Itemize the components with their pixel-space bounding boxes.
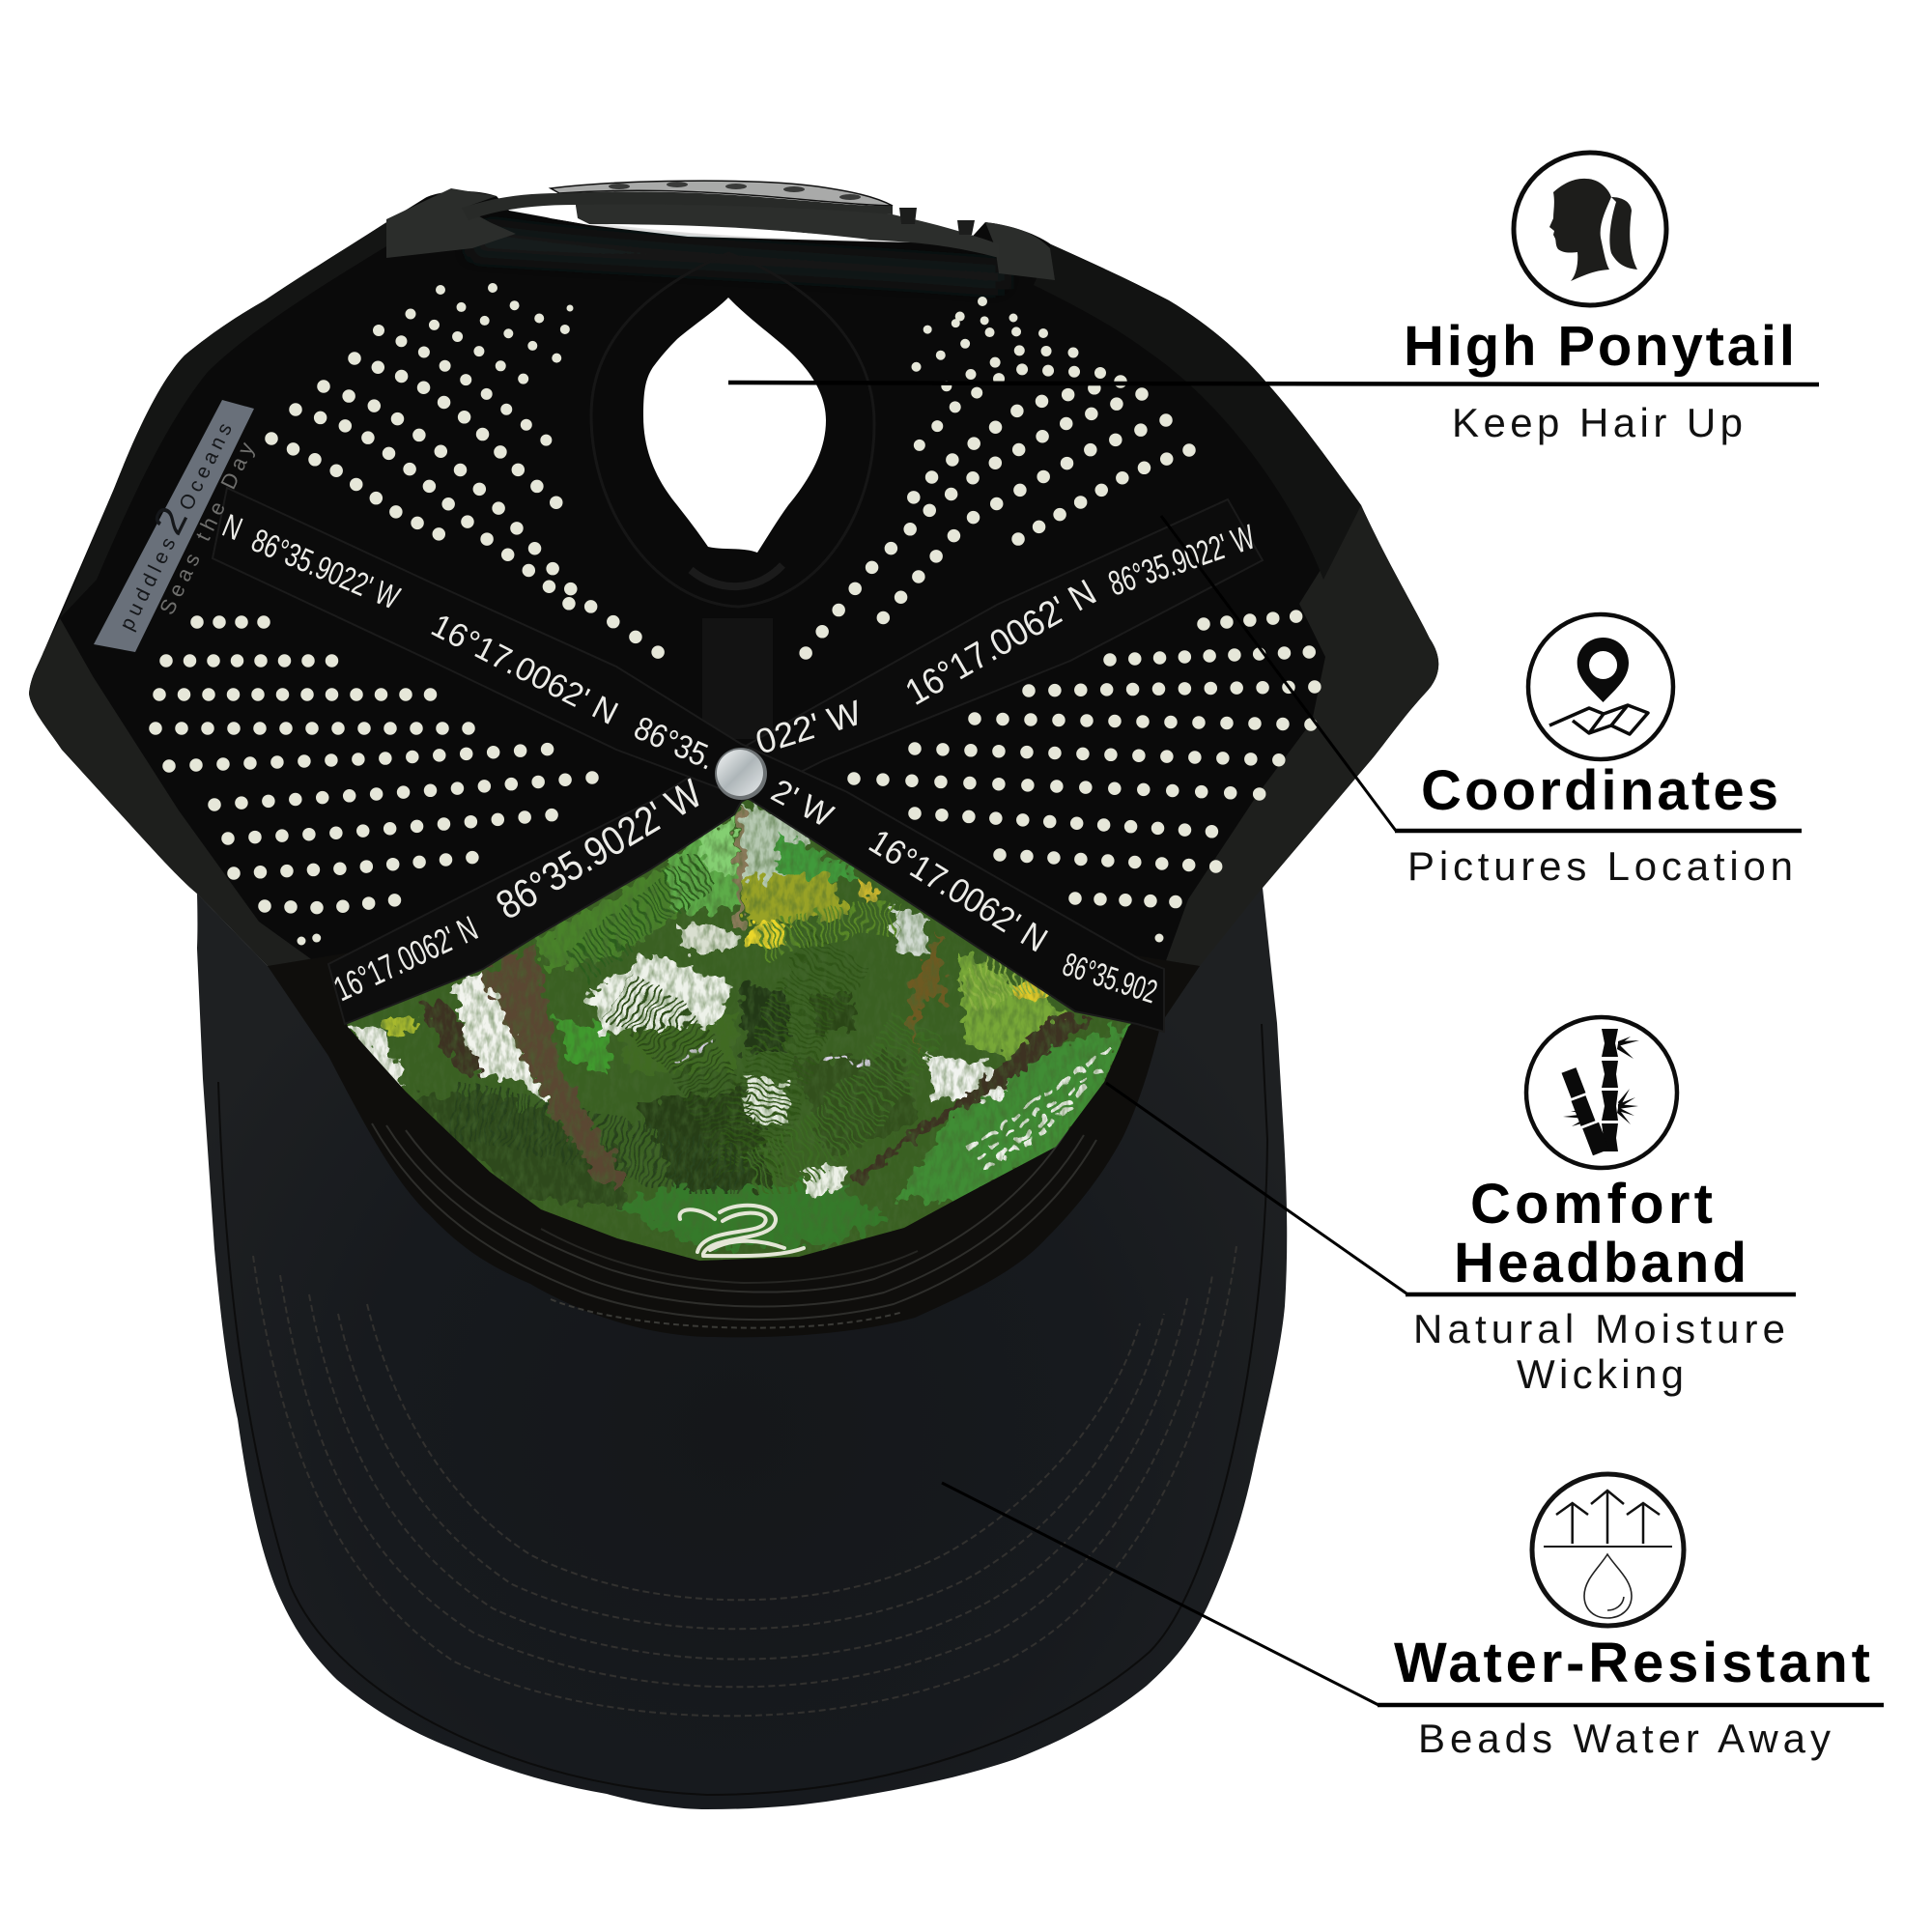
coordinate tape: lower left [327, 749, 763, 1024]
white leaf flecks [676, 1043, 1111, 1169]
cap illustration [29, 181, 1438, 1809]
mesh perforations: upper-right panel [797, 301, 1189, 665]
cap crown underside [29, 191, 1438, 990]
heading: Water-Resistant: Water-Resistant [1394, 1632, 1870, 1694]
brand tag [94, 400, 254, 652]
strap gaps showing background [516, 206, 869, 240]
logo swirl on lining [680, 1206, 804, 1256]
coordinate tape: upper left to lower right: 86°35.9022' W [246, 522, 405, 617]
callout: coordinates [1161, 516, 1802, 889]
subtitle: Pictures Location: Pictures Location [1407, 843, 1793, 889]
coordinate tape: lower left: 86°35.9022' W [488, 770, 710, 928]
coordinate tape: upper left to lower right [213, 488, 1164, 1032]
callout: high ponytail [728, 153, 1819, 445]
side bindings [29, 217, 1438, 976]
subtitle: Natural Moisture Wicking: Natural Moisture [1413, 1306, 1785, 1351]
satin sweatband [268, 927, 1200, 1337]
strap tabs [386, 188, 1055, 280]
icon: woman with ponytail [1514, 153, 1666, 305]
mesh perforations: lower-left panel [156, 622, 616, 941]
heading: Comfort Headband: Comfort [1470, 1173, 1713, 1236]
callout: water resistant [942, 1474, 1884, 1761]
adjustable back strap [462, 181, 999, 258]
coordinate tape: upper left to lower right: 16°17.0062' N [425, 607, 624, 732]
mesh seam strip [702, 618, 773, 739]
coordinate tape: upper left to lower right: 16°17.0062' N [863, 821, 1055, 960]
frond feathering [454, 869, 1063, 1179]
coordinate tape: lower left: 16°17.0062' N [327, 908, 483, 1009]
subtitle: Natural Moisture Wicking [1413, 1306, 1785, 1397]
lighter crown fabric under strap [464, 224, 1005, 290]
coordinate tape: upper right: 86°35.9022' W [1103, 517, 1260, 604]
icon: water repelled by arrows [1532, 1474, 1684, 1626]
coordinate tape: upper left to lower right: 86°35.902 [1059, 946, 1161, 1011]
mesh perforations: lower-right panel [854, 616, 1315, 938]
leader line: headband [1106, 1083, 1796, 1294]
brim stitching [218, 1024, 1267, 1795]
mesh perforations: upper-left panel [271, 288, 676, 665]
heading: Comfort Headband [1454, 1173, 1747, 1294]
palm trunks [418, 807, 1094, 1188]
ponytail opening surround [591, 253, 874, 607]
leader line: ponytail [728, 383, 1819, 384]
subtitle: Keep Hair Up: Keep Hair Up [1452, 400, 1743, 445]
coordinate tape: upper left to lower right: N [217, 507, 247, 548]
leader line: coordinates [1161, 516, 1802, 831]
center snap rivet [715, 748, 767, 800]
heading: High Ponytail: High Ponytail [1404, 315, 1795, 378]
coordinate tape: upper right [741, 499, 1263, 802]
cap brim underside [197, 888, 1287, 1809]
sky and highlights [348, 905, 1044, 1193]
coordinate tape: upper left to lower right: 86°35. [629, 710, 721, 778]
icon: bamboo [1526, 1017, 1677, 1168]
subtitle: Natural Moisture Wicking: Wicking [1517, 1351, 1684, 1397]
leader line: water resistant [942, 1483, 1884, 1705]
palm tree lining print [347, 800, 1131, 1261]
brand tag: puddles2Oceans [98, 411, 242, 636]
icon: map pin [1528, 614, 1673, 759]
subtitle: Beads Water Away: Beads Water Away [1418, 1716, 1831, 1761]
coordinate tape: upper left to lower right: 2' W [765, 773, 838, 835]
foliage colour patches [406, 805, 1130, 1246]
coordinate tape: upper right: 022' W [751, 693, 866, 762]
ponytail opening [643, 298, 826, 553]
callout: comfort headband [1106, 1017, 1796, 1397]
heading: Coordinates: Coordinates [1421, 759, 1778, 822]
heading: Comfort Headband: Headband [1454, 1232, 1747, 1294]
coordinate tape: upper right: 16°17.0062' N [898, 572, 1103, 714]
tagline by tag: Seas the Day [155, 439, 259, 618]
